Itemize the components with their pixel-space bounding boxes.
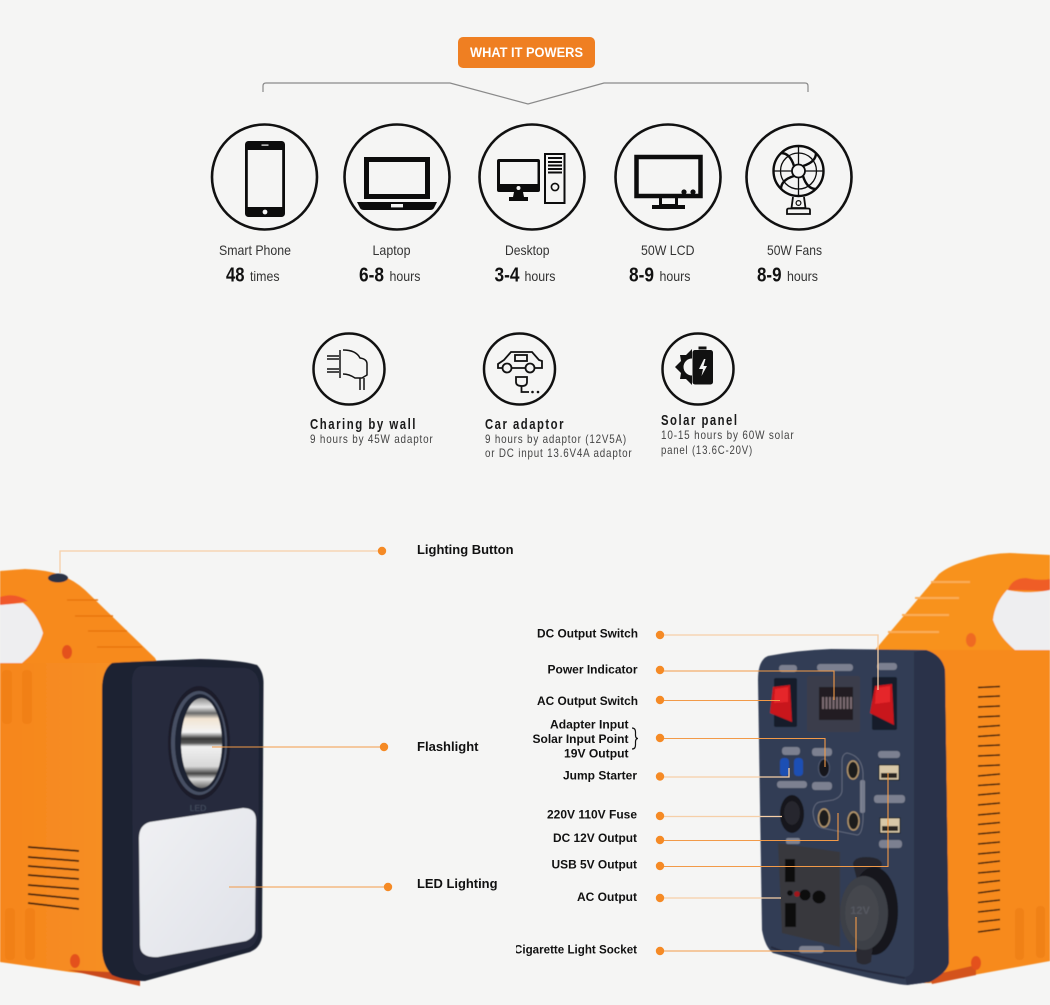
charging: solar panel: Solar panel <box>661 412 738 429</box>
item: desktop: Desktop <box>505 242 550 258</box>
item: 50W fans: 50W Fans <box>767 242 822 258</box>
item: laptop: 6-8 <box>359 264 384 286</box>
callout: cigarette light socket: Cigarette Light Socket <box>514 942 637 956</box>
item: smart phone: Smart Phone <box>219 242 291 258</box>
callouts: front <box>60 542 514 891</box>
callout: flashlight: Flashlight <box>417 739 479 754</box>
item: laptop <box>344 124 450 286</box>
callout: AC output switch <box>537 694 780 708</box>
product photo: rear panel of power station <box>758 553 1050 985</box>
fuse <box>780 795 804 833</box>
callout: DC 12V output <box>553 813 838 845</box>
LED lamp panel <box>139 808 256 957</box>
item: desktop: 3-4 <box>494 264 520 286</box>
heading badge: what it powers <box>458 37 595 68</box>
callout: fuse <box>547 808 782 822</box>
flashlight <box>168 686 230 800</box>
callout: adapter and solar input <box>532 718 825 767</box>
callout: DC output switch: DC Output Switch <box>537 626 638 640</box>
charging: car adaptor: 9 hours by adaptor (12V5A) <box>485 432 627 446</box>
callout: USB 5V output <box>552 773 888 872</box>
item: 50W fans <box>746 124 852 286</box>
callout: flashlight <box>212 739 479 754</box>
charging: solar panel <box>661 334 794 457</box>
cigarette lighter socket <box>853 857 882 880</box>
callout: jump starter: Jump Starter <box>563 768 637 782</box>
callout: LED lighting <box>229 876 498 891</box>
callout: AC output <box>577 890 781 904</box>
LED text: LED <box>190 803 206 813</box>
panel labels <box>777 663 905 953</box>
product photo: rear panel of power station: 12V <box>850 905 870 917</box>
USB ports <box>879 765 899 780</box>
charging options row <box>310 334 794 460</box>
callout: AC output switch: AC Output Switch <box>537 694 638 708</box>
device row: what it powers <box>212 124 852 286</box>
item: smart phone: times <box>250 268 280 284</box>
heading badge: what it powers: WHAT IT POWERS <box>470 45 583 60</box>
callout: DC 12V output: DC 12V Output <box>553 831 637 845</box>
handle <box>875 553 1050 655</box>
charging: car adaptor: or DC input 13.6V4A adaptor <box>485 446 632 460</box>
rocker switches and indicator <box>774 678 797 727</box>
charging: solar panel: 10-15 hours by 60W solar <box>661 428 794 442</box>
side vents <box>28 847 79 909</box>
callout: LED lighting: LED Lighting <box>417 876 498 891</box>
callout: adapter and solar input: 19V Output <box>564 746 628 760</box>
AC socket <box>778 843 840 947</box>
charging: wall: 9 hours by 45W adaptor <box>310 432 434 446</box>
item: 50W LCD: 50W LCD <box>641 242 694 258</box>
callout: cigarette light socket <box>514 917 856 956</box>
item: 50W fans: hours <box>787 268 818 284</box>
item: laptop: Laptop <box>372 242 411 258</box>
callout: power indicator <box>548 662 834 700</box>
callout: jump starter <box>563 768 789 782</box>
side vents <box>978 686 1000 932</box>
charging: wall <box>310 334 434 446</box>
charging: car adaptor <box>484 334 632 460</box>
dark front frame <box>102 659 264 981</box>
callout: USB 5V output: USB 5V Output <box>552 858 637 872</box>
callout: adapter and solar input: Adapter Input <box>550 718 628 732</box>
handle <box>0 569 160 668</box>
item: 50W fans: 8-9 <box>757 264 782 286</box>
jacks <box>818 759 859 830</box>
callouts: rear panel <box>514 626 888 956</box>
orange body <box>900 650 1050 983</box>
orange body <box>0 663 112 976</box>
jump starter terminals <box>780 758 789 776</box>
item: 50W LCD: 8-9 <box>629 264 654 286</box>
item: 50W LCD <box>616 124 720 286</box>
callout: fuse: 220V 110V Fuse <box>547 808 637 822</box>
callout: power indicator: Power Indicator <box>548 662 638 676</box>
item: desktop <box>480 124 584 286</box>
charging: car adaptor: Car adaptor <box>485 416 565 433</box>
charging: solar panel: panel (13.6C-20V) <box>661 443 753 457</box>
callout: AC output: AC Output <box>577 890 637 904</box>
callout: lighting button <box>60 542 514 573</box>
charging: wall: Charing by wall <box>310 416 417 433</box>
item: 50W LCD: hours <box>660 268 690 284</box>
callout: adapter and solar input: Solar Input Point <box>532 732 628 746</box>
item: smart phone: 48 <box>226 264 244 286</box>
item: laptop: hours <box>390 268 420 284</box>
item: smart phone <box>212 124 317 286</box>
item: desktop: hours <box>524 268 556 284</box>
navy back frame <box>758 649 949 985</box>
callout: DC output switch <box>537 626 878 690</box>
callout: lighting button: Lighting Button <box>417 542 514 557</box>
product photo: front of power station <box>0 569 264 986</box>
bracket connector <box>263 83 808 104</box>
